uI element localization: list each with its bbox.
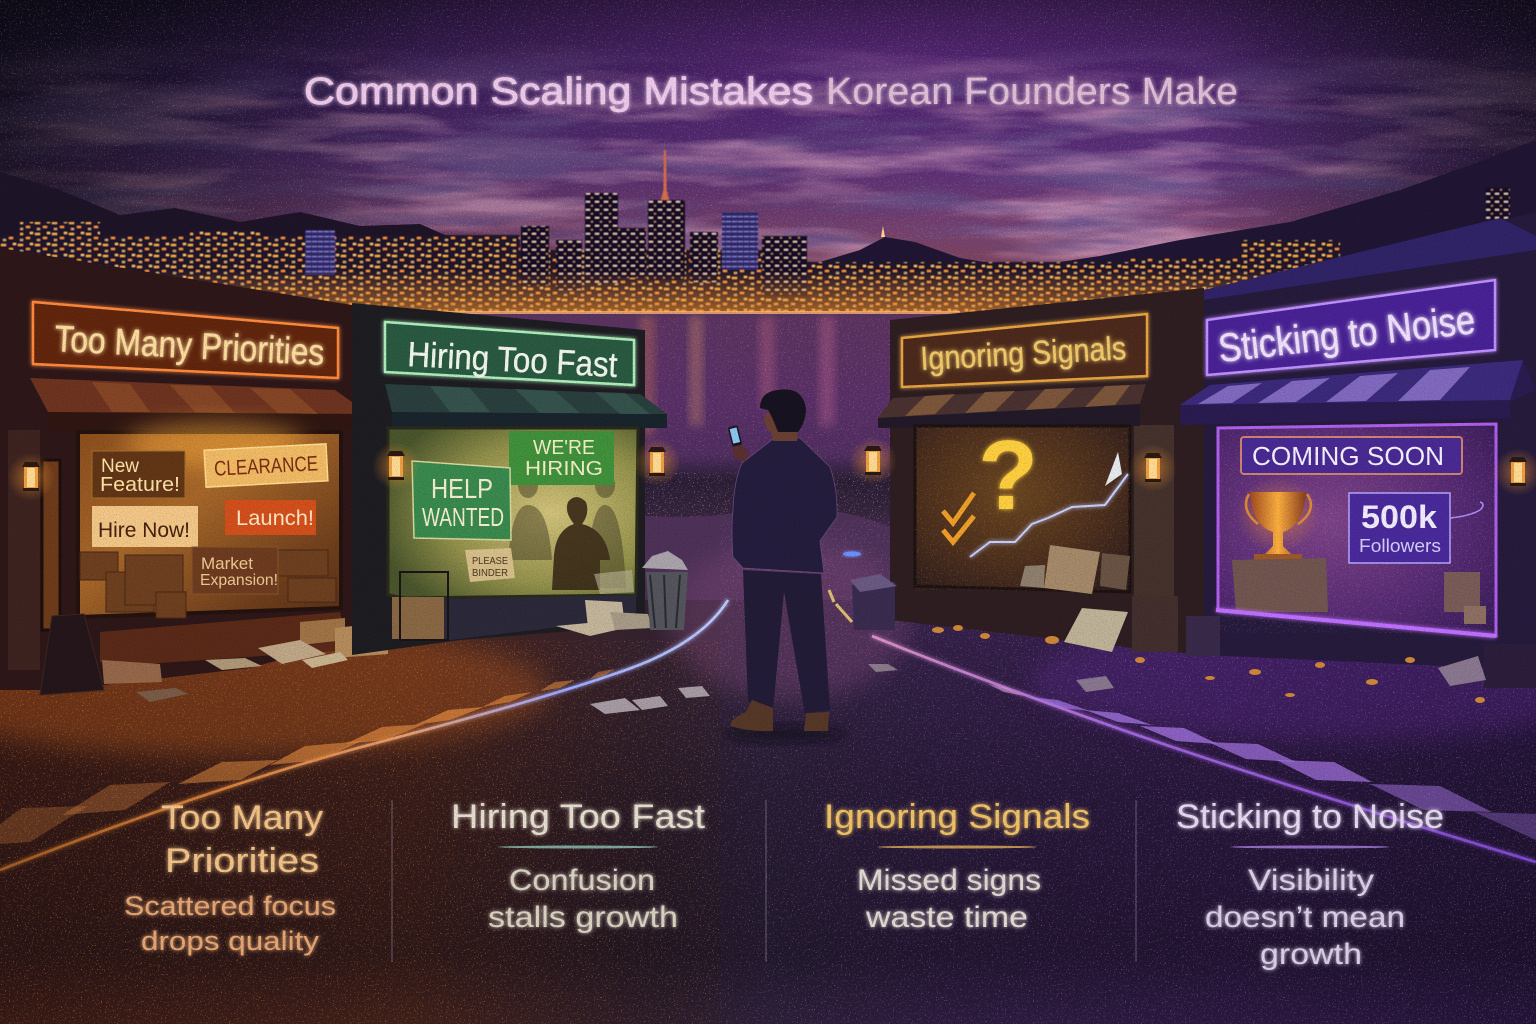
awning	[1180, 360, 1536, 425]
sign: 500k Followers: 500k	[1361, 499, 1437, 535]
neck and face side	[764, 412, 798, 441]
A-frame board	[40, 614, 104, 695]
background: ground and road	[0, 512, 1536, 1024]
caption: Too Many Priorities: Too Many	[161, 799, 323, 837]
shoes	[730, 700, 829, 731]
window ledge	[100, 612, 350, 665]
shop window	[78, 432, 341, 617]
caption: Sticking to Noise: Sticking to Noise	[1176, 798, 1444, 836]
lantern: left	[849, 437, 897, 485]
sign: New Feature!	[92, 451, 185, 498]
shop window	[1218, 424, 1496, 636]
stone pillar	[8, 430, 40, 670]
silhouettes of new hires	[508, 472, 626, 590]
question mark: ?	[978, 420, 1038, 530]
caption: Hiring Too Fast: Hiring Too Fast	[451, 798, 706, 836]
shop window	[388, 428, 638, 598]
shop window	[915, 426, 1130, 592]
caption: Ignoring Signals: waste time	[865, 901, 1028, 934]
awning	[878, 384, 1146, 428]
lantern: left	[372, 442, 420, 490]
caption: Too Many Priorities	[124, 799, 336, 956]
panel: caption dividers	[392, 800, 1136, 962]
shop sign: Sticking to Noise	[1216, 298, 1477, 371]
blue road glint	[843, 552, 861, 556]
background: city skyline	[0, 150, 1536, 315]
door	[42, 460, 60, 630]
caption: Sticking to Noise: Visibility	[1248, 864, 1374, 897]
title: Common Scaling Mistakes	[304, 71, 813, 113]
title	[304, 71, 1238, 113]
sign: Market Expansion!	[192, 547, 278, 594]
background: mountains	[0, 140, 1536, 300]
lantern: right	[1129, 444, 1177, 492]
sign: We're Hiring	[509, 431, 614, 485]
trash bin	[850, 574, 897, 630]
sign: We're Hiring: HIRING	[525, 458, 603, 480]
trousers	[743, 570, 830, 714]
storefront: Ignoring Signals	[849, 288, 1204, 655]
central figure: founder looking at phone	[725, 389, 845, 742]
caption: Sticking to Noise: growth	[1260, 938, 1362, 971]
newspaper leaning on wall	[1064, 608, 1128, 652]
building facade	[1204, 212, 1536, 670]
sign: 500k Followers	[1349, 493, 1450, 563]
chart arrow	[1105, 452, 1122, 486]
shop sign: Too Many Priorities	[54, 318, 325, 373]
window light glow	[125, 423, 305, 467]
jacket	[732, 438, 837, 573]
sign: Help Wanted: HELP	[431, 473, 493, 504]
sign: We're Hiring: WE'RE	[533, 437, 595, 459]
sign: Hire Now!: Hire Now!	[98, 519, 190, 542]
sign: Help Wanted	[412, 461, 511, 540]
caption: Ignoring Signals: Ignoring Signals	[824, 798, 1090, 836]
small paper notice	[465, 548, 515, 582]
storefront: Too Many Priorities	[0, 248, 388, 702]
caption: Too Many Priorities: Priorities	[165, 842, 319, 880]
stone base block	[1186, 616, 1220, 656]
stone base block	[1132, 596, 1178, 652]
window ledge	[405, 595, 636, 640]
building facade	[890, 288, 1204, 655]
roof cornice	[1204, 218, 1536, 300]
caption: Sticking to Noise: doesn’t mean	[1205, 901, 1405, 934]
shop sign: Ignoring Signals	[919, 329, 1127, 377]
sign: Coming Soon: COMING SOON	[1252, 441, 1444, 471]
building facade	[0, 248, 352, 690]
storefront: Sticking to Noise	[1180, 212, 1536, 688]
small paper notice: PLEASE	[472, 556, 508, 567]
boxes and papers on the ground	[102, 618, 388, 702]
scattered paper on road	[590, 656, 1486, 714]
shop sign	[902, 314, 1147, 387]
sign: 500k Followers: Followers	[1359, 536, 1441, 556]
shop sign: Hiring Too Fast	[407, 335, 619, 385]
phone	[728, 425, 742, 447]
caption: Too Many Priorities: Scattered focus	[124, 891, 336, 921]
end stone block	[1484, 644, 1536, 688]
caption: Hiring Too Fast	[451, 798, 706, 934]
boxes in window	[1444, 572, 1486, 624]
rising line chart	[970, 474, 1128, 557]
stacked boxes by cart	[392, 572, 448, 640]
paper stacks	[556, 570, 652, 636]
lantern: left	[7, 453, 55, 501]
road dashes: left	[0, 669, 614, 846]
background: river	[440, 311, 960, 498]
sign: Coming Soon	[1241, 437, 1462, 474]
sign: New Feature!: New	[101, 456, 139, 477]
window glow sill	[1216, 610, 1496, 636]
road edge line: left	[0, 600, 728, 870]
road lane marks: centre	[829, 590, 852, 622]
small paper notice: BINDER	[472, 568, 508, 579]
awning	[385, 384, 667, 428]
neon squiggle	[1450, 502, 1483, 518]
stacked boxes in window	[80, 550, 336, 618]
sign: Market Expansion!: Market	[201, 554, 253, 573]
trophy on pedestal	[1232, 477, 1328, 612]
building facade	[352, 303, 645, 655]
sign: CLEARANCE	[204, 444, 328, 487]
sign: Launch!: Launch!	[236, 507, 314, 530]
fallen leaves on pavement	[932, 625, 1485, 703]
checkmarks	[943, 493, 974, 542]
sign: New Feature!: Feature!	[100, 474, 180, 496]
sign: Hire Now!	[92, 506, 198, 547]
sign: CLEARANCE: CLEARANCE	[214, 452, 319, 481]
lantern: right	[1494, 448, 1536, 496]
papers in window	[1020, 545, 1130, 594]
trash can	[642, 551, 688, 630]
title: Korean Founders Make	[826, 71, 1238, 113]
hand	[732, 445, 749, 462]
awning	[30, 378, 369, 430]
stone pillar	[1134, 425, 1174, 600]
sign: Help Wanted: WANTED	[422, 502, 504, 532]
caption: Ignoring Signals: Missed signs	[857, 864, 1041, 897]
background: night sky	[0, 0, 1536, 320]
road edge line: right	[872, 636, 1536, 862]
ground shadow	[725, 726, 845, 742]
shop sign	[33, 302, 338, 378]
shop sign	[385, 322, 634, 385]
caption: Hiring Too Fast: stalls growth	[488, 901, 678, 934]
caption: Ignoring Signals	[824, 798, 1090, 934]
storefront: Hiring Too Fast	[352, 303, 688, 655]
road dashes: right	[988, 684, 1536, 840]
caption: Too Many Priorities: drops quality	[141, 926, 320, 956]
sign: Launch!	[225, 500, 316, 535]
sign: Market Expansion!: Expansion!	[200, 572, 278, 589]
caption: Sticking to Noise	[1176, 798, 1444, 971]
lantern: right	[633, 438, 681, 486]
caption: Hiring Too Fast: Confusion	[509, 864, 655, 897]
hair	[760, 389, 806, 432]
heading underline glows	[498, 846, 1390, 848]
background: far shore with small lights	[620, 455, 920, 540]
